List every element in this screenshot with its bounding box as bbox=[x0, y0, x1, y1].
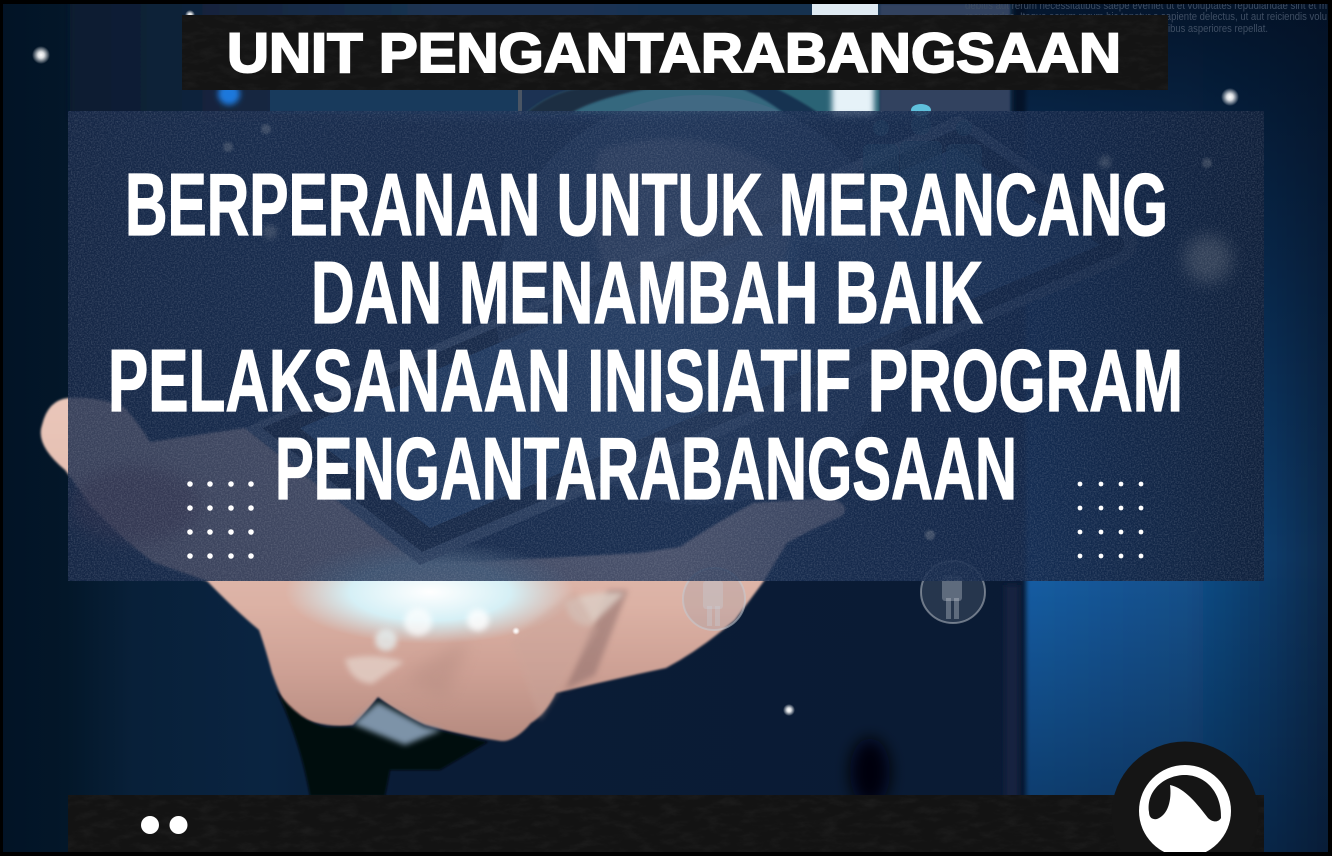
tablet behind panel bbox=[246, 95, 1028, 565]
logo badge bbox=[1112, 742, 1258, 856]
sparkle lights bbox=[32, 10, 1239, 716]
shirt cuff and shadow bbox=[276, 690, 488, 796]
suit edge bbox=[1005, 585, 1019, 800]
bottom bar bbox=[68, 795, 1264, 852]
panel heading text bbox=[108, 155, 1183, 518]
blue wall on right bbox=[1010, 0, 1332, 856]
glowing palm bbox=[292, 546, 568, 642]
finger shadows bbox=[420, 650, 460, 686]
globe bbox=[497, 95, 802, 477]
network icon circles bbox=[683, 561, 985, 630]
upper background shapes bbox=[70, 0, 1012, 120]
hand bbox=[41, 398, 845, 741]
dot grid left bbox=[187, 481, 254, 559]
faint lorem text top right bbox=[966, 4, 1326, 34]
dot grid right bbox=[1078, 482, 1143, 558]
people icons bbox=[863, 142, 947, 184]
light bokeh in panel bbox=[223, 124, 1232, 540]
reddish palm shading bbox=[75, 474, 192, 538]
small blue spot bbox=[341, 579, 349, 587]
blue light spot bbox=[218, 83, 240, 105]
faint lorem text top right: ibus asperiores repellat. bbox=[1168, 23, 1268, 35]
suit fold shadow bbox=[850, 738, 890, 806]
panel heading text: DAN MENAMBAH BAIK bbox=[311, 243, 983, 342]
title text: UNIT PENGANTARABANGSAAN bbox=[227, 21, 1121, 84]
main translucent panel bbox=[68, 111, 1264, 581]
pagination dots bbox=[141, 816, 188, 834]
teal dot above panel bbox=[911, 104, 931, 116]
title bar bbox=[182, 15, 1168, 90]
